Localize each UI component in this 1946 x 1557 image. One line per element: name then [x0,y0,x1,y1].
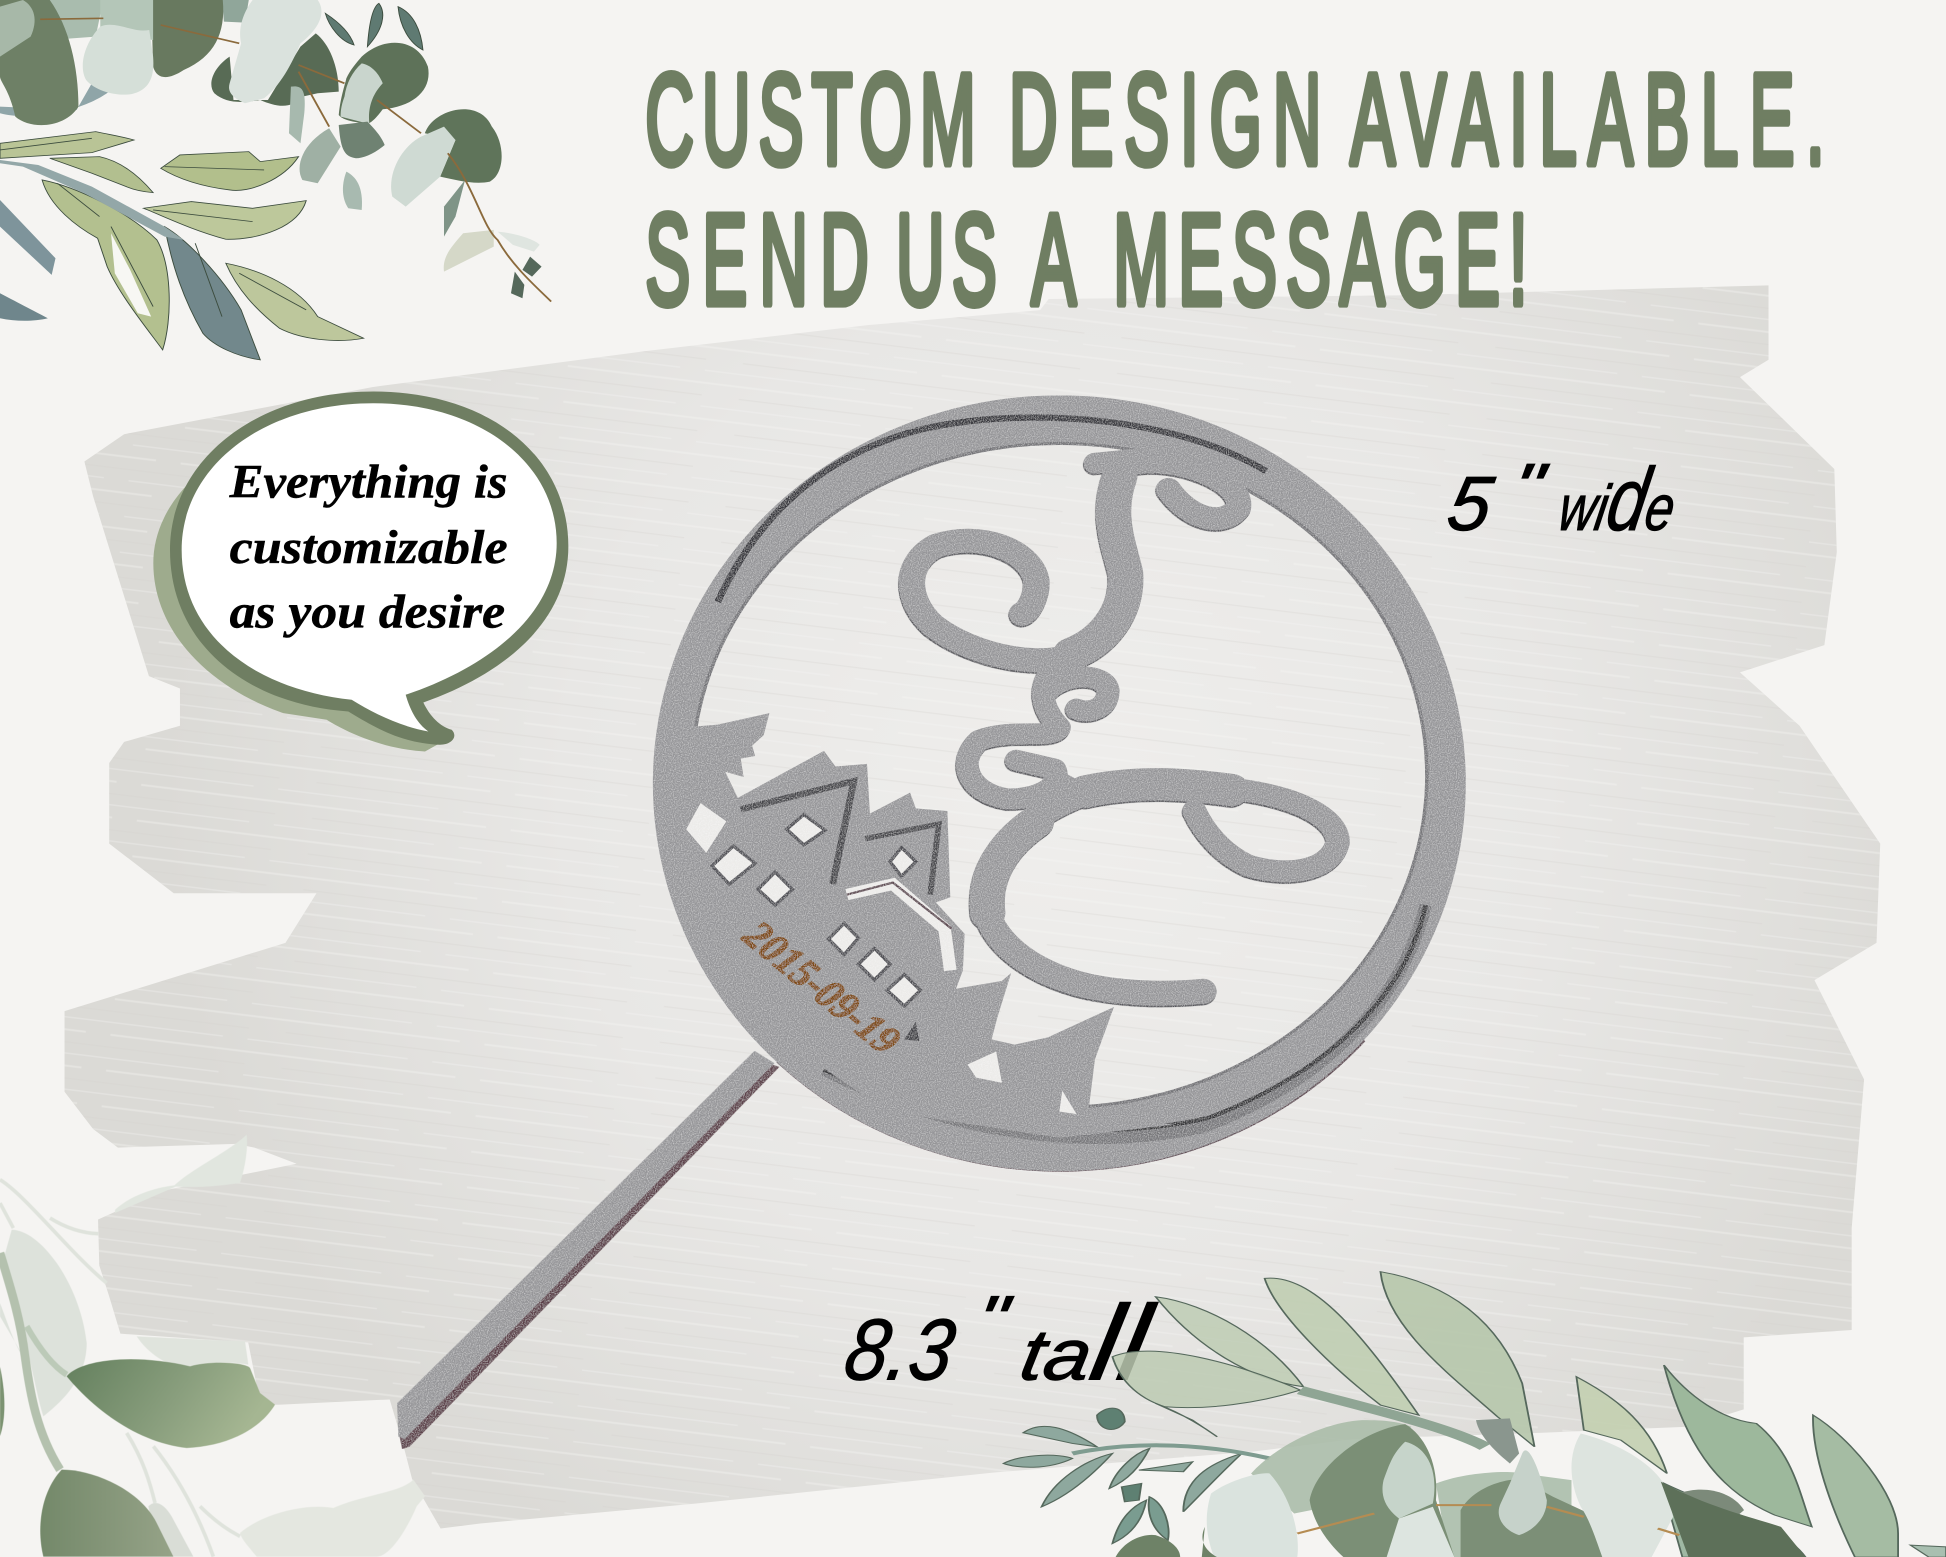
bubble text: as you desire [230,587,505,639]
width label: 5 [1442,461,1500,547]
background brush stroke with white wood photo [65,285,1880,1528]
bubble text: customizable [230,522,508,574]
bubble interior [182,403,557,731]
foliage bottom right [1003,1272,1946,1557]
monogram letters [912,459,1338,993]
pale background leaves [0,1135,425,1557]
bubble text: Everything is [229,457,508,508]
bubble outline [170,392,568,745]
speech bubble [153,392,568,751]
title line 2: SEND [645,187,869,332]
topper stick [397,1051,779,1449]
height label [838,1283,1162,1402]
eucalyptus cluster [1116,1418,1806,1557]
stems [0,1180,240,1557]
engraved date: 2015-09-19 [733,912,910,1063]
title line 2: MESSAGE! [1113,187,1528,332]
title line 2: A [1031,187,1076,332]
title line 2: US [896,187,997,332]
bubble text [229,457,508,639]
title line 2 [645,187,1528,332]
house windows [712,815,920,1006]
olive leaves [0,132,364,360]
village and trees silhouette [669,713,1174,1138]
title line 1 [645,47,1825,191]
topper ring [653,395,1466,1171]
letter S [912,459,1239,660]
title line 1: DESIGN [1009,47,1321,191]
bubble shadow [153,467,440,751]
stems [40,18,551,302]
width label: " [1507,450,1553,523]
foliage bottom left [0,1135,425,1557]
letter C [984,784,1338,993]
foliage top left [0,0,551,360]
title line 1: CUSTOM [645,47,976,191]
height label: " [970,1283,1017,1357]
eucalyptus leaves [0,0,542,298]
height label: 8.3 [838,1301,962,1398]
height label: tall [1014,1283,1162,1402]
ampersand flourish [967,667,1108,799]
green leaf lower [40,1470,173,1557]
title [645,47,1825,332]
title line 1: AVAILABLE. [1350,47,1825,191]
green leaf upper [67,1359,275,1448]
green leaf edge [0,1366,4,1436]
width label: wide [1553,449,1685,550]
cake topper product [397,395,1466,1449]
upper sage leaves [1112,1272,1946,1557]
small sprig [1003,1403,1270,1543]
width label [1442,449,1685,550]
